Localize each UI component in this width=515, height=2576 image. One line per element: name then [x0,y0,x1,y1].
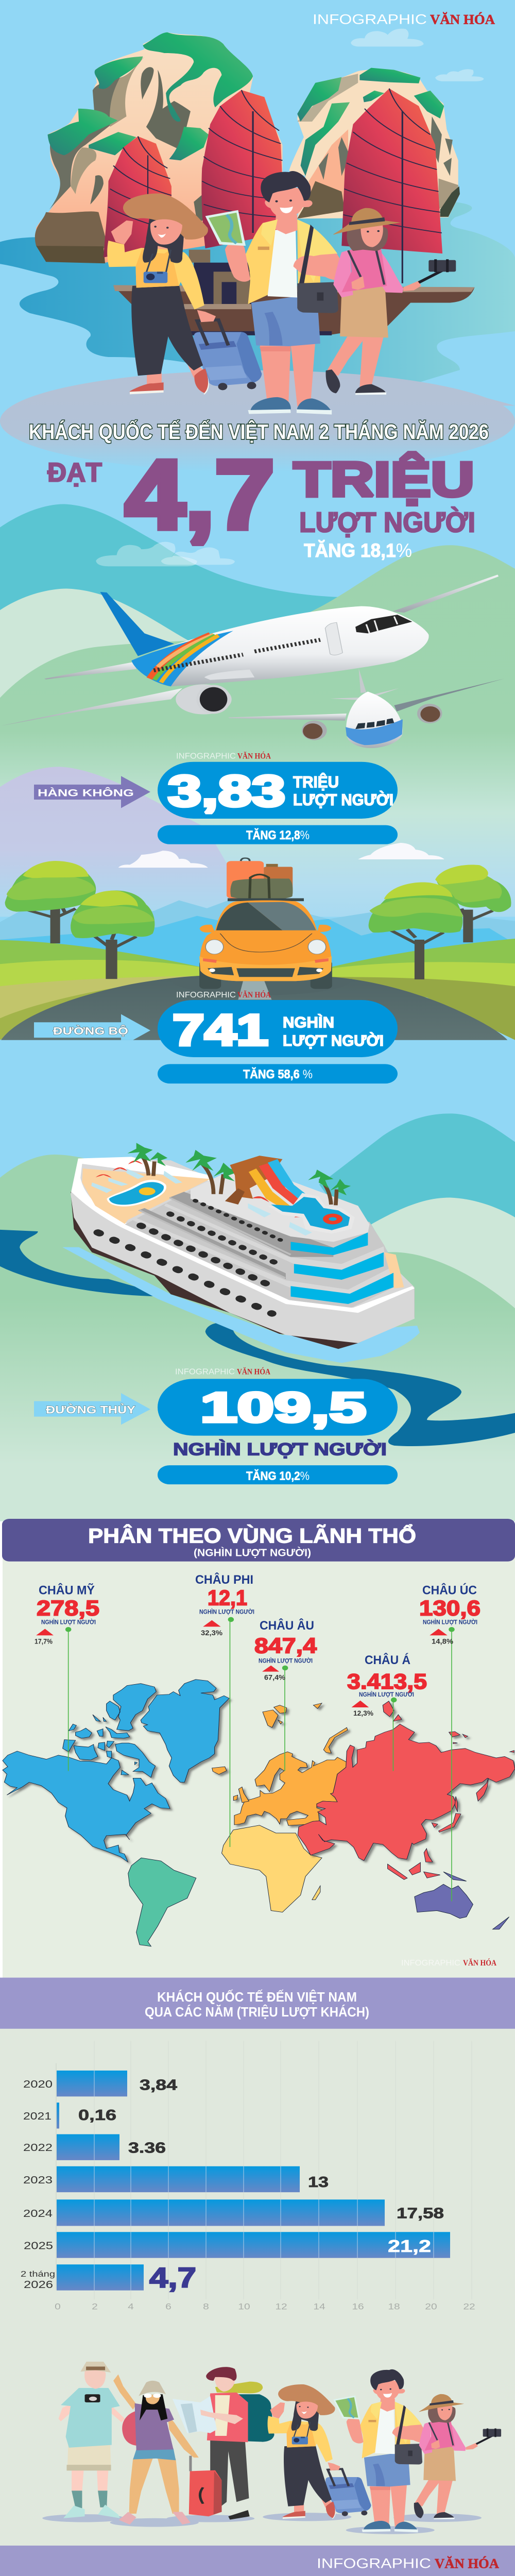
header: chart title: KHÁCH QUỐC TẾ ĐẾN VIỆT NAM [157,1989,357,2005]
car with luggage [199,858,332,989]
panel: chart background [0,2028,515,2546]
trees [5,861,511,979]
grid [94,2041,472,2299]
unit: nghìn lượt người: NGHÌN LƯỢT NGƯỜI [173,1439,387,1459]
label: Châu Á: CHÂU Á [365,1653,410,1667]
year labels: 2021 [23,2110,52,2122]
footer bar [0,2546,515,2576]
year labels: 2024 [23,2208,53,2219]
logo water section: VĂN HÓA [237,1367,270,1376]
axis labels: 0 [55,2302,61,2312]
callout lines [68,1619,452,1901]
sun deck [82,1168,210,1224]
railings [140,1198,290,1278]
hull side [71,1159,415,1343]
hills [0,940,203,989]
label: Châu Úc: 130,6 [419,1597,480,1620]
axis labels: 6 [165,2302,171,2312]
axis labels: 8 [203,2302,209,2312]
arrow: Đường thủy: ĐƯỜNG THỦY [46,1403,135,1416]
shore ellipse under tourists [0,370,515,472]
label: Châu Úc: 14,8% [432,1637,453,1646]
label: Châu Úc: NGHÌN LƯỢT NGƯỜI [423,1619,477,1625]
growth total: TĂNG 18,1% [304,540,412,561]
clouds translucent [96,542,235,566]
bar chart: arrivals by year [21,2041,475,2312]
red sails [104,89,442,283]
label: Châu Phi: 12,1 [208,1586,247,1610]
pill: road arrivals 741: 741 [173,1005,268,1055]
road scene [0,843,515,1040]
logo air section: VĂN HÓA [237,751,271,760]
label: Châu Âu: CHÂU ÂU [260,1618,314,1632]
value labels: 17,58 [397,2205,444,2222]
axis labels: 20 [425,2302,437,2312]
pill: water arrivals 109,5: 109,5 [200,1383,366,1431]
pill: growth air: TĂNG 12,8% [246,828,310,842]
clouds [118,843,444,868]
pill: road arrivals 741: NGHÌN [283,1013,334,1031]
header: regions: PHÂN THEO VÙNG LÃNH THỔ [88,1524,416,1547]
pill: air arrivals 3,83: TRIỆU [293,772,339,791]
bay water [0,202,515,383]
value labels [78,2077,444,2294]
ground shadows [42,2513,482,2534]
pool on sun deck [107,1180,166,1207]
Greenland [141,1680,229,1782]
headline: Đạt 4,7 triệu lượt người: ĐẠT [47,457,102,487]
palm trees [127,1143,351,1205]
label: Châu Phi: CHÂU PHI [195,1572,253,1586]
bars [57,2071,450,2291]
pill: water arrivals 109,5 [158,1379,398,1436]
hill: teal behind ship [319,1113,515,1258]
bar grid overlays [94,2071,434,2291]
shore ground left piece [23,372,515,405]
logo map: VĂN HÓA [463,1958,496,1967]
label: Châu Âu [254,1618,317,1682]
year labels: 2 tháng [21,2269,55,2278]
hill: pale left [0,589,191,702]
axis labels: 14 [313,2302,325,2312]
label: Châu Úc: CHÂU ÚC [422,1583,477,1597]
axis labels: 12 [275,2302,287,2312]
backpacker man with map and red suitcase [173,2367,274,2520]
plane small [228,668,504,748]
man with camera [59,2362,125,2518]
logo bottom [317,2555,499,2571]
logo road section: INFOGRAPHIC [176,990,236,999]
map callouts [36,1617,455,1901]
year labels: 2025 [24,2240,53,2251]
world map south: South America [128,1858,196,1946]
axis labels: 4 [128,2302,134,2312]
logo road section: VĂN HÓA [237,990,271,999]
page background: sky [0,0,515,1521]
label: Châu Phi: 32,3% [201,1629,222,1637]
road centre line [238,981,271,999]
axis labels: 16 [352,2302,364,2312]
tourists trio (bottom, reused artwork) [268,2369,501,2532]
pill: growth water: TĂNG 10,2% [246,1469,310,1483]
hill: teal left [0,504,340,649]
arrow: Hàng không [34,776,150,808]
label: Châu Á: NGHÌN LƯỢT NGƯỜI [359,1691,414,1698]
world map: Australia [415,1872,509,1929]
world map: Asia [298,1701,515,1862]
panel: regional map [3,1537,515,1978]
hull rim [71,1157,415,1313]
value labels: 3,84 [140,2077,177,2093]
value labels: 3.36 [128,2140,166,2156]
label: Châu Á: 3.413,5 [347,1670,427,1694]
tourists group (left three) [42,2362,482,2534]
header: chart title: QUA CÁC NĂM (TRIỆU LƯỢT KHÁCH) [145,2005,369,2020]
pill: growth air [158,825,398,844]
value labels: 21,2 [388,2237,431,2256]
karst rock left [35,32,283,263]
year labels: 2026 [24,2279,53,2290]
pill: road arrivals 741: LƯỢT NGƯỜI [283,1031,384,1049]
logo bottom: VĂN HÓA [435,2555,499,2571]
ship scene hills [371,1197,515,1313]
year labels: 2020 [23,2078,53,2090]
value labels: 13 [308,2174,329,2190]
junk boat [113,250,475,335]
arrow: Đường bộ: ĐƯỜNG BỘ [53,1025,128,1037]
luggage [227,861,264,899]
label: Châu Úc [419,1583,480,1646]
pill: air arrivals 3,83: LƯỢT NGƯỜI [293,790,393,809]
hill: lilac [0,767,258,917]
headline: Đạt 4,7 triệu lượt người: TRIỆU [294,452,474,506]
hero illustration: Ha Long bay junk boat and tourists [0,29,515,405]
logo top: INFOGRAPHIC [313,12,427,27]
world map: Europe [212,1703,348,1825]
pill: air arrivals 3,83: 3,83 [168,767,285,816]
plane large [0,574,499,726]
pill: growth water [158,1465,398,1484]
logo water section: INFOGRAPHIC [175,1367,235,1376]
year labels [21,2078,55,2290]
headline: Đạt 4,7 triệu lượt người: 4,7 [125,440,274,549]
woman with sunglasses [113,2375,199,2524]
axis labels: 10 [238,2302,250,2312]
label: Châu Phi: NGHÌN LƯỢT NGƯỜI [199,1608,254,1615]
pill: air arrivals 3,83 [158,762,398,819]
road [1,976,507,1040]
karst rock right [289,68,460,218]
logo top: VĂN HÓA [430,11,495,27]
hull dark [71,1192,415,1349]
roof rack [228,899,304,901]
arrow: Đường thủy [34,1393,150,1425]
year labels: 2022 [23,2141,53,2153]
label: Châu Á [347,1653,427,1717]
water slide tower [225,1156,355,1234]
hill: green lower [0,545,515,917]
sun loungers and umbrellas [91,1161,312,1235]
label: Châu Âu: NGHÌN LƯỢT NGƯỜI [259,1657,313,1664]
header: regions: (NGHÌN LƯỢT NGƯỜI) [194,1546,311,1558]
axis labels: 18 [388,2302,400,2312]
wake [62,1247,420,1363]
left white strip [0,1544,3,1978]
label: Châu Mỹ: 17,7% [35,1637,53,1646]
tourists trio (hero) [107,171,456,415]
logo bottom: INFOGRAPHIC [317,2556,431,2571]
label: Châu Âu: 847,4 [254,1634,317,1658]
label: Châu Mỹ: 278,5 [37,1597,99,1620]
axis labels [55,2302,475,2312]
hill: green ship section [0,1155,515,1521]
cloud small [435,69,484,81]
world map: islands of south east Asia [388,1862,440,1879]
glass bands [290,1232,368,1255]
upper deck levels [125,1180,394,1308]
header: chart title [0,1978,515,2029]
header: regions [2,1519,515,1562]
growth triangles [36,1620,448,1707]
logo map: INFOGRAPHIC [401,1958,460,1967]
pill: growth road: TĂNG 58,6 % [243,1067,313,1081]
value labels: 0,16 [78,2107,116,2123]
label: Châu Mỹ [35,1583,99,1646]
world map: Africa [222,1825,322,1912]
logo top [313,11,495,27]
portholes [98,1200,283,1314]
label: Châu Mỹ: NGHÌN LƯỢT NGƯỜI [41,1619,96,1625]
label: Châu Mỹ: CHÂU MỸ [39,1583,95,1597]
river [0,1230,515,1446]
mountains [0,896,515,944]
axis labels: 22 [463,2302,475,2312]
pill: growth road [158,1064,398,1083]
world map west: North America [3,1680,229,1862]
label: Châu Âu: 67,4% [264,1673,285,1682]
arrow: Hàng không: HÀNG KHÔNG [38,787,134,799]
arrow: Đường bộ [34,1014,150,1040]
headline: Đạt 4,7 triệu lượt người [47,440,475,549]
cruise ship [62,1143,420,1363]
year labels: 2023 [23,2174,53,2185]
cloud top right [351,29,424,46]
body [200,900,332,981]
logo air section: INFOGRAPHIC [176,751,236,760]
label: Châu Phi [195,1572,254,1637]
value labels: 4,7 [149,2262,196,2294]
label: Châu Á: 12,3% [353,1709,373,1717]
axis labels: 2 [92,2302,98,2312]
pill: road arrivals 741 [158,1000,398,1057]
wheels [199,960,221,989]
